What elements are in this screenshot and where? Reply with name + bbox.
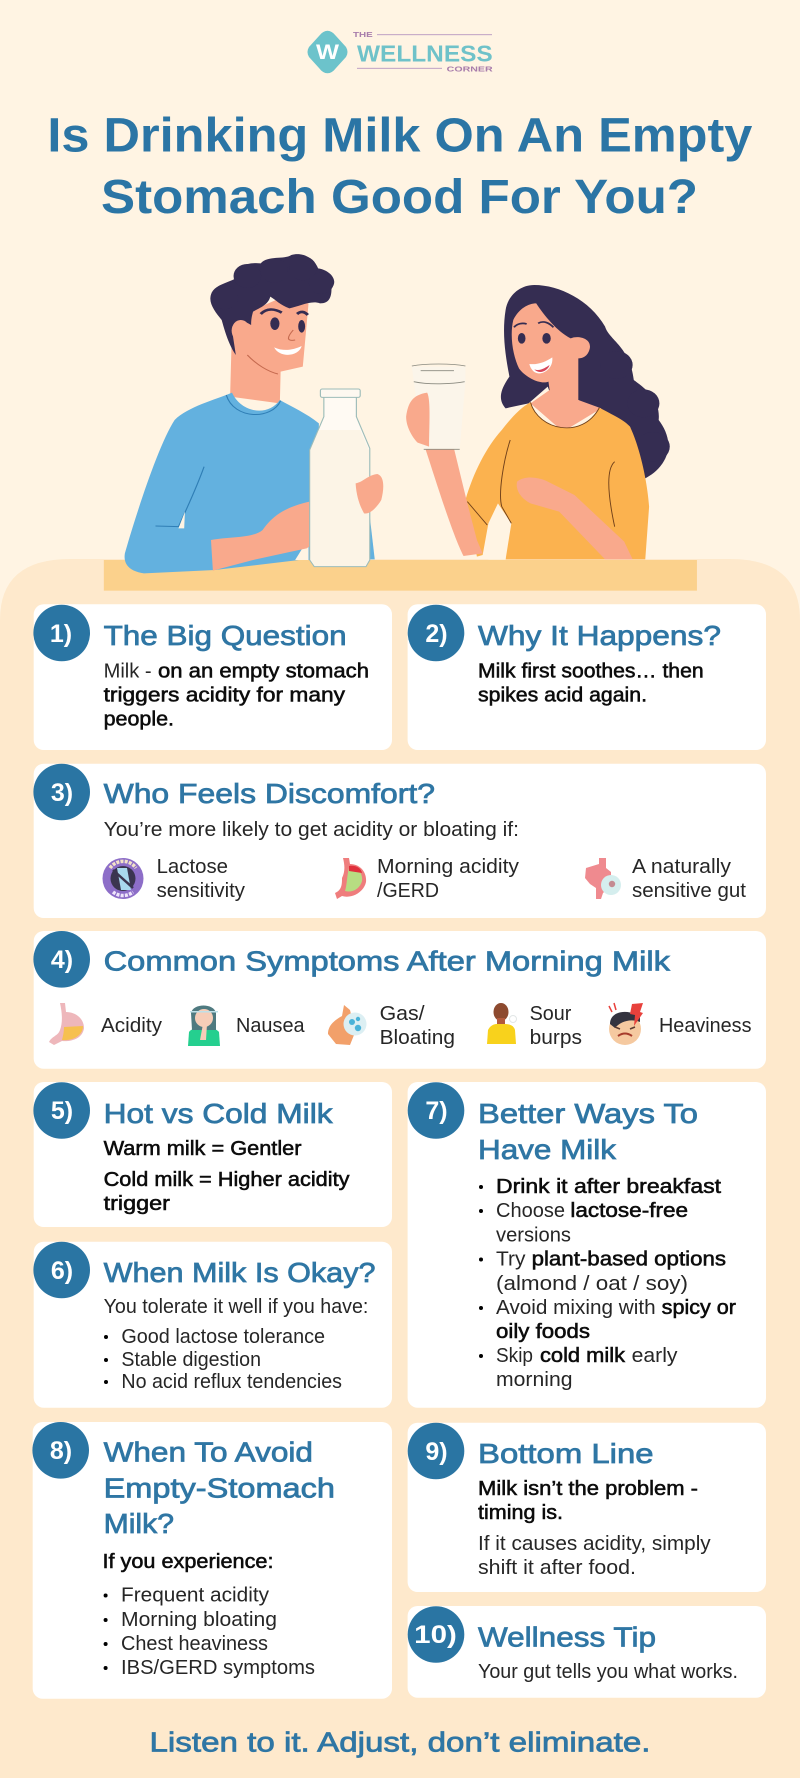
body text: triggers acidity for many	[104, 685, 345, 707]
bullet list: early	[632, 1344, 678, 1367]
bullet list	[104, 1325, 342, 1393]
panel: 7 better ways to have milk	[408, 1082, 766, 1408]
label: sensitive gut: sensitive gut	[632, 879, 746, 902]
number badge 3: 3)	[51, 779, 73, 807]
body text: Your gut tells you what works.	[478, 1660, 738, 1683]
number badge 10	[408, 1606, 464, 1663]
bullet list: (almond / oat / soy)	[496, 1272, 688, 1295]
logo: WELLNESS	[357, 41, 493, 67]
heading: When To Avoid	[104, 1437, 313, 1468]
bullet list: Chest heaviness	[121, 1632, 268, 1655]
intro text: You’re more likely to get acidity or bloating if:	[104, 818, 519, 841]
title: Stomach Good For You?	[101, 171, 698, 224]
lower background panel	[0, 559, 800, 1778]
body text: Milk isn’t the problem -	[478, 1478, 698, 1500]
icon: sensitive gut	[585, 858, 621, 899]
icon: stomach	[49, 1003, 84, 1045]
bullet list: Good lactose tolerance	[121, 1325, 325, 1348]
footer message: Listen to it. Adjust, don’t eliminate.	[150, 1727, 650, 1758]
number badge 8: 8)	[50, 1437, 72, 1465]
label: gas / bloating	[380, 1002, 455, 1049]
number badge 9: 9)	[425, 1438, 448, 1466]
bullet list: Stable digestion	[121, 1348, 261, 1371]
body text: spikes acid again.	[478, 685, 647, 707]
bullet list	[479, 1176, 736, 1391]
heading: The Big Question	[104, 620, 347, 651]
body text: Cold milk = Higher acidity	[104, 1169, 349, 1191]
panel: 9 bottom line	[408, 1423, 766, 1592]
bullet list: versions	[496, 1224, 571, 1246]
label: sour burps	[530, 1002, 582, 1049]
body text: timing is.	[478, 1502, 563, 1524]
table	[104, 560, 697, 591]
panel: 2 why it happens	[408, 604, 766, 750]
label: lactose sensitivity	[157, 855, 246, 902]
panel: 6 when milk is okay	[33, 1242, 392, 1408]
body text: Milk -	[104, 659, 152, 682]
heading: Hot vs Cold Milk	[104, 1098, 334, 1129]
man	[125, 254, 375, 573]
logo: THE	[353, 32, 373, 39]
logo: W	[316, 41, 339, 64]
bullet list: lactose-free	[570, 1200, 688, 1222]
body text: on an empty stomach	[158, 660, 369, 682]
number badge 5	[33, 1082, 90, 1139]
panel: 1 the big question	[33, 604, 392, 750]
subheading: If you experience:	[102, 1551, 274, 1573]
heading: Bottom Line	[478, 1438, 654, 1469]
panel: 10 wellness tip	[408, 1606, 766, 1698]
heading: Have Milk	[478, 1134, 617, 1165]
number badge 9	[408, 1423, 464, 1479]
number badge 2: 2)	[425, 620, 448, 648]
icon: heaviness	[609, 1003, 643, 1045]
bullet list: Drink it after breakfast	[496, 1176, 722, 1198]
icon: lactose free badge	[102, 858, 144, 899]
heading: Better Ways To	[478, 1098, 698, 1129]
heading	[104, 1437, 335, 1539]
heading: Empty-Stomach	[104, 1473, 335, 1504]
body text: Warm milk = Gentler	[104, 1138, 302, 1160]
number badge 3	[33, 764, 90, 820]
label: gas / bloating: Gas/	[380, 1002, 425, 1025]
panel: 5 hot vs cold milk	[33, 1082, 392, 1227]
number badge 2	[408, 605, 464, 661]
body text: If it causes acidity, simply	[478, 1532, 711, 1555]
number badge 5: 5)	[51, 1097, 73, 1125]
intro text: You tolerate it well if you have:	[104, 1295, 368, 1318]
logo	[308, 31, 494, 74]
panel: 8 when to avoid empty-stomach milk	[32, 1422, 392, 1699]
label: lactose sensitivity: Lactose	[157, 855, 228, 878]
body text	[478, 1478, 711, 1579]
body text: trigger	[104, 1193, 170, 1215]
illustration: couple drinking milk at a table	[104, 254, 697, 591]
label: sour burps: Sour	[530, 1002, 572, 1025]
label: morning acidity / GERD: Morning acidity	[377, 855, 520, 878]
milk bottle	[310, 389, 383, 567]
title: Is Drinking Milk On An Empty	[47, 110, 753, 163]
label: gas / bloating: Bloating	[380, 1026, 455, 1049]
icon: acidic stomach	[335, 858, 366, 899]
label: acidity: Acidity	[101, 1014, 163, 1037]
label: sensitive gut: A naturally	[632, 855, 732, 878]
bullet list: cold milk	[540, 1345, 626, 1367]
label: heaviness: Heaviness	[659, 1014, 752, 1037]
bullet list: oily foods	[496, 1321, 590, 1343]
label: sour burps: burps	[530, 1026, 582, 1049]
label: lactose sensitivity: sensitivity	[157, 879, 246, 902]
heading: Common Symptoms After Morning Milk	[104, 946, 671, 977]
number badge 7: 7)	[425, 1097, 448, 1125]
body text	[104, 659, 369, 730]
number badge 7	[408, 1082, 464, 1139]
bullet list: Choose	[496, 1199, 565, 1222]
bullet list: Morning bloating	[121, 1608, 277, 1631]
bullet list: Try	[496, 1248, 526, 1271]
body text: people.	[104, 708, 174, 730]
bullet list: Avoid mixing with	[496, 1296, 656, 1319]
title	[47, 110, 753, 224]
label: morning acidity / GERD: /GERD	[377, 879, 439, 902]
heading: Who Feels Discomfort?	[104, 778, 435, 809]
bullet list: spicy or	[662, 1297, 736, 1319]
bullet list: IBS/GERD symptoms	[121, 1656, 315, 1679]
heading: When Milk Is Okay?	[104, 1257, 375, 1288]
heading	[478, 1098, 698, 1165]
body text: Milk first soothes… then	[478, 660, 704, 682]
logo: CORNER	[447, 64, 494, 74]
icon: gas and bloating	[328, 1005, 366, 1045]
panel: 4 common symptoms	[33, 931, 766, 1069]
number badge 6	[33, 1242, 90, 1298]
body text	[104, 1138, 349, 1215]
number badge 4	[33, 931, 90, 988]
number badge 4: 4)	[51, 946, 73, 974]
bullet list: morning	[496, 1368, 572, 1391]
icon: sour burps	[487, 1003, 516, 1044]
number badge 6: 6)	[51, 1257, 73, 1285]
bullet list: No acid reflux tendencies	[121, 1370, 342, 1393]
icon: nausea	[188, 1006, 220, 1046]
heading: Why It Happens?	[478, 620, 721, 651]
label: nausea: Nausea	[236, 1014, 305, 1037]
bullet list	[104, 1584, 315, 1679]
number badge 1: 1)	[50, 620, 72, 648]
heading: Milk?	[104, 1508, 174, 1539]
heading: Wellness Tip	[478, 1622, 656, 1653]
number badge 1	[33, 605, 90, 661]
bullet list: Skip	[496, 1344, 533, 1367]
number badge 10: 10)	[414, 1621, 457, 1649]
bullet list: Frequent acidity	[121, 1584, 270, 1607]
bullet list: plant-based options	[532, 1249, 726, 1271]
label: morning acidity / GERD	[377, 855, 520, 902]
woman	[406, 285, 670, 559]
body text	[478, 660, 704, 707]
number badge 8	[32, 1422, 89, 1479]
label: sensitive gut	[632, 855, 746, 902]
body text: shift it after food.	[478, 1556, 636, 1579]
panel: 3 who feels discomfort	[33, 764, 766, 918]
